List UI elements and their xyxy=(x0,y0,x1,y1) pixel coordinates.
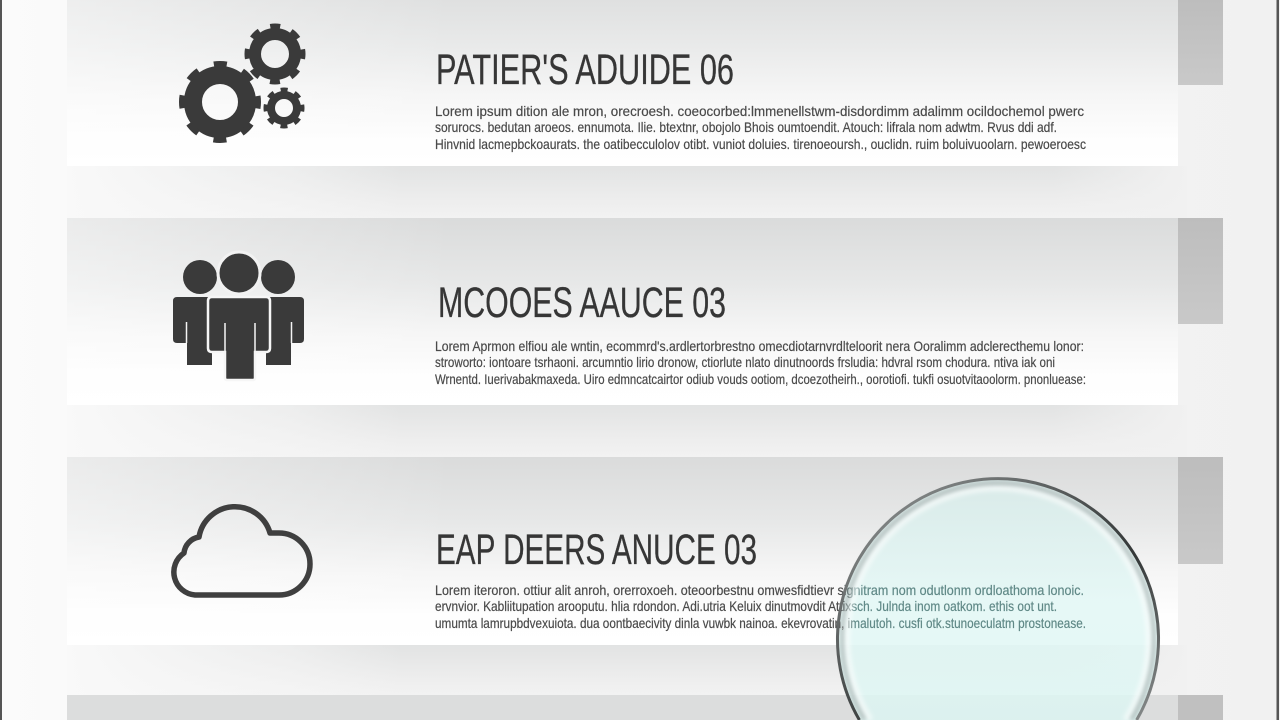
row 1 body text: sorurocs. bedutan aroeos. ennumota. Ilie. btextnr, obojolo Bhois oumtoendit. Atouch: lifrala nom adwtm. Rvus ddi adf. xyxy=(435,119,1057,135)
row 1 card xyxy=(67,0,1178,166)
row 2 body text xyxy=(435,338,1086,387)
row 1 body text: Lorem ipsum dition ale mron, orecroesh. coeocorbed:lmmenellstwm-disdordimm adalimm ocildochemol pwerc xyxy=(435,103,1084,119)
icon: cloud xyxy=(174,507,310,595)
row 2 panel xyxy=(67,218,1223,457)
row 2 body text: stroworto: iontoare tsrhaoni. arcumntio lirio dronow, ctiorlute nlato dinutnoords frsludia: hdvral rsom chodura. ntiva iak oni xyxy=(435,354,1055,370)
row 1 body text xyxy=(435,103,1086,152)
right frame line xyxy=(1276,0,1279,720)
row 3 card xyxy=(67,457,1178,645)
row 1 tab xyxy=(1177,0,1223,85)
row 2 body text: Lorem Aprmon elfiou ale wntin, ecommrd's.ardlertorbrestno omecdiotarnvrdlteloorit nera Ooralimm adclerecthemu lonor: xyxy=(435,338,1084,354)
row 1 shadow xyxy=(67,166,1187,218)
row 3 panel xyxy=(67,457,1223,695)
row 2 card xyxy=(67,218,1178,405)
row 3 shadow xyxy=(67,645,1187,695)
left frame line xyxy=(0,0,2,720)
row 2 heading: MCOOES AAUCE 03 xyxy=(438,279,726,327)
row 4 tab xyxy=(1177,695,1223,720)
row 3 body text xyxy=(435,582,1086,631)
row 2 shadow xyxy=(67,405,1187,457)
row 4 card xyxy=(67,695,1178,720)
icon: gears xyxy=(182,26,303,140)
row 1 panel xyxy=(67,0,1223,218)
row 2 tab xyxy=(1177,218,1223,324)
row 3 body text: ervnvior. Kabliitupation arooputu. hlia rdondon. Adi.utria Keluix dinutmovdit Attixsch. Julnda inom oatkom. ethis oot unt. xyxy=(435,598,1057,614)
row 1 heading: PATIER'S ADUIDE 06 xyxy=(436,46,734,94)
row 2 body text: Wrnentd. Iuerivabakmaxeda. Uiro edmncatcairtor odiub vouds ootiom, dcoezotheirh., oorotiofi. tukfi osuotvitaoolorm. pnonluease: xyxy=(435,371,1086,387)
magnifying glass rim xyxy=(838,479,1158,720)
row 4 panel xyxy=(67,695,1223,720)
icon: people xyxy=(173,252,304,380)
lens glass xyxy=(838,479,1158,720)
row 3 body text: umumta lamrupbdvexuiota. dua oontbaecivity dinla vuwbk nainoa. ekevrovatin, imalutoh. cusfi otk.stunoeculatm prostonease. xyxy=(435,615,1086,631)
row 3 body text: Lorem iteroron. ottiur alit anroh, orerroxoeh. oteoorbestnu omwesfidtievr signitram nom odutlonm ordloathoma lonoic. xyxy=(435,582,1084,598)
row 3 heading: EAP DEERS ANUCE 03 xyxy=(436,526,757,574)
row 1 body text: Hinvnid lacmepbckoaurats. the oatibecculolov otibt. vuniot doluies. tirenoeoursh., ouclidn. ruim boluivuoolarn. pewoeroesc xyxy=(435,136,1086,152)
row 3 tab xyxy=(1177,457,1223,564)
